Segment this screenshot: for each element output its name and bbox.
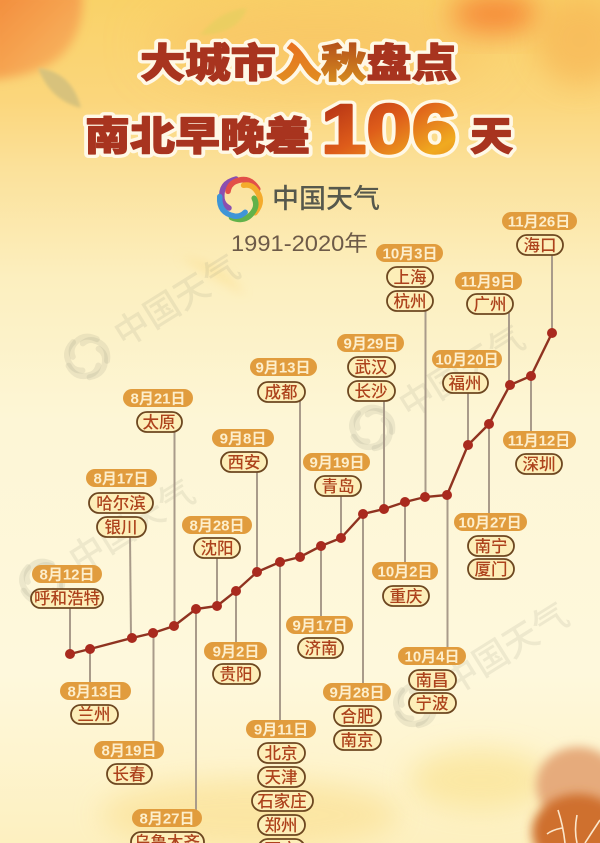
- marker: 贵阳: 贵阳: [220, 665, 252, 684]
- marker: 沈阳: 8月28日: [189, 518, 245, 534]
- title: 106: [321, 90, 457, 168]
- marker: 太原: [123, 389, 193, 631]
- marker: 南宁 厦门: 南宁: [474, 537, 508, 556]
- marker: 南昌 宁波: 宁波: [416, 694, 448, 713]
- marker: 哈尔滨 银川: 哈尔滨: [96, 494, 146, 513]
- marker: 重庆: 重庆: [390, 587, 422, 606]
- title: 南北早晚差: [85, 115, 310, 159]
- marker: 合肥 南京: [323, 509, 391, 750]
- title: 南北早晚差: [85, 115, 310, 159]
- marker: 广州: 11月9日: [461, 274, 515, 290]
- marker: 广州: 广州: [474, 295, 506, 314]
- marker: 深圳: 深圳: [522, 455, 556, 474]
- watermark: lower right: 中国天气: [436, 596, 576, 703]
- marker: 福州: 10月20日: [435, 352, 499, 368]
- title: 大城市 入秋盘点: [140, 42, 457, 86]
- icon: China Weather logo: [215, 175, 266, 226]
- marker: 深圳: [503, 371, 576, 474]
- title: 106: [321, 90, 457, 168]
- marker: 武汉 长沙: 9月29日: [343, 336, 399, 352]
- marker: 广州: [455, 272, 522, 390]
- marker: 重庆: 10月2日: [377, 564, 433, 580]
- marker: 乌鲁木齐: [131, 604, 204, 843]
- marker: 呼和浩特: [31, 565, 103, 659]
- marker: 武汉 长沙: 长沙: [354, 382, 388, 401]
- marker: 海口: 11月26日: [508, 214, 570, 230]
- marker: 长春: [94, 628, 164, 784]
- marker: 长春: 长春: [112, 765, 146, 784]
- marker: 南宁 厦门: 10月27日: [458, 514, 522, 532]
- marker: 南昌 宁波: [398, 490, 466, 713]
- year range: 1991-2020年: [231, 231, 368, 256]
- marker: 南昌 宁波: 南昌: [416, 671, 448, 690]
- marker: 成都: 9月13日: [255, 360, 311, 376]
- title: 天: [470, 115, 513, 159]
- marker: 北京 天津 石家庄 郑州: 郑州: [264, 816, 298, 835]
- marker: 合肥 南京: 合肥: [340, 707, 374, 726]
- marker: 贵阳: [204, 586, 267, 684]
- marker: 西安: [212, 429, 274, 577]
- marker: 北京 天津 石家庄 郑州: [246, 557, 316, 843]
- watermark: middle left: [9, 469, 206, 618]
- marker: 西安: 9月8日: [220, 430, 266, 448]
- marker: 深圳: 11月12日: [508, 432, 570, 450]
- marker: 呼和浩特: 8月12日: [39, 566, 95, 584]
- line chart: trend line: [70, 333, 552, 654]
- marker: 北京 天津 石家庄 郑州: 北京: [264, 744, 298, 763]
- marker: 上海 杭州: [376, 244, 443, 502]
- marker: 济南: 9月17日: [292, 618, 348, 634]
- watermark: right: 中国天气: [392, 319, 532, 426]
- marker: 重庆: [372, 497, 438, 606]
- marker: 北京 天津 石家庄 郑州: 9月11日: [254, 722, 308, 738]
- marker: 哈尔滨 银川: [86, 469, 157, 643]
- marker: 兰州: 8月13日: [67, 684, 123, 700]
- marker: 青岛: 青岛: [322, 477, 354, 496]
- marker: 北京 天津 石家庄 郑州: 石家庄: [257, 791, 307, 811]
- marker: 合肥 南京: 9月28日: [329, 684, 385, 702]
- marker: 沈阳: 沈阳: [200, 539, 234, 558]
- brand name: 中国天气: [272, 184, 380, 214]
- marker: 南昌 宁波: 10月4日: [404, 648, 460, 666]
- watermark: upper left: [54, 244, 251, 393]
- watermark: middle left: 中国天气: [62, 473, 202, 580]
- tree: bottom right autumn foliage: [532, 747, 600, 843]
- marker: 福州: [432, 350, 502, 450]
- marker: 呼和浩特: 呼和浩特: [34, 589, 100, 608]
- marker: 上海 杭州: 10月3日: [382, 246, 438, 262]
- marker: 合肥 南京: 南京: [340, 731, 374, 750]
- marker: 上海 杭州: 杭州: [394, 292, 426, 311]
- marker: 太原: 太原: [142, 413, 176, 432]
- marker: 青岛: 9月19日: [309, 454, 365, 472]
- marker: 济南: 济南: [304, 639, 338, 658]
- marker: 北京 天津 石家庄 郑州: 天津: [264, 768, 298, 787]
- watermark: upper left: 中国天气: [107, 248, 247, 355]
- marker: 太原: 8月21日: [130, 390, 186, 408]
- marker: 南宁 厦门: [454, 419, 527, 579]
- title: [85, 42, 513, 168]
- marker: 哈尔滨 银川: 8月17日: [93, 470, 149, 488]
- marker: 沈阳: [182, 516, 252, 611]
- marker: 海口: [502, 212, 577, 338]
- marker: 海口: 海口: [524, 236, 556, 255]
- marker: 济南: [286, 541, 353, 658]
- marker: 成都: [250, 358, 317, 562]
- marker: 西安: 西安: [228, 453, 260, 472]
- marker: 兰州: [60, 644, 131, 724]
- marker: 兰州: 兰州: [78, 705, 110, 724]
- marker: 成都: 成都: [264, 383, 298, 402]
- marker: 长春: 8月19日: [101, 742, 157, 760]
- watermark: lower right: [383, 592, 580, 741]
- watermark: right: [339, 315, 536, 464]
- marker: 青岛: [303, 453, 370, 543]
- marker: 福州: 福州: [448, 374, 482, 393]
- marker: 上海 杭州: 上海: [394, 268, 426, 287]
- marker: 贵阳: 9月2日: [213, 644, 259, 660]
- marker: 哈尔滨 银川: 银川: [104, 518, 138, 537]
- marker: 武汉 长沙: [337, 334, 404, 514]
- title: 大城市入秋盘点: [140, 42, 457, 86]
- marker: 乌鲁木齐: 8月27日: [139, 810, 195, 828]
- marker: 武汉 长沙: 武汉: [354, 358, 388, 377]
- marker: 南宁 厦门: 厦门: [474, 560, 508, 579]
- title: 天: [470, 115, 513, 159]
